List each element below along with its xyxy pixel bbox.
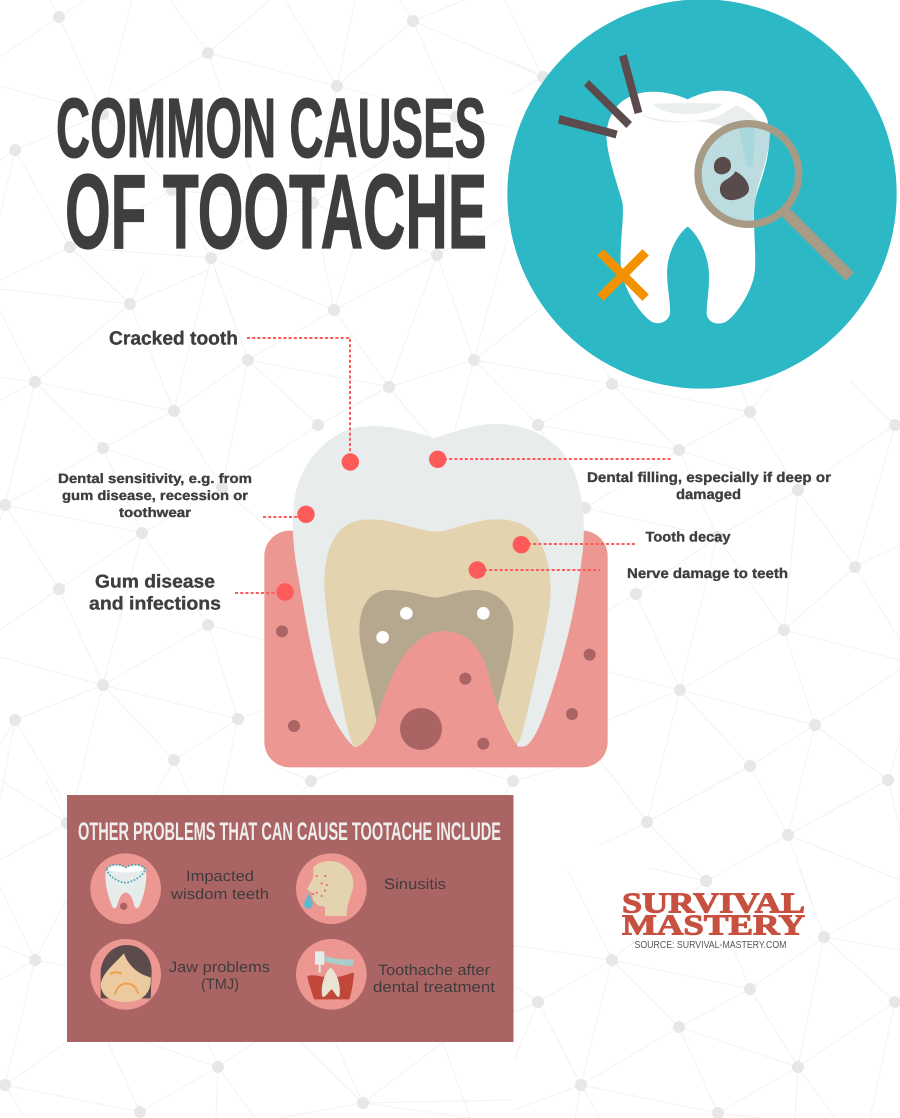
icon: jaw problems face (90, 939, 161, 1010)
cavities (714, 157, 749, 200)
item text: toothache after dental treatment: dental treatment (373, 979, 496, 996)
enamel (293, 424, 584, 747)
item text: impacted wisdom teeth (170, 868, 269, 903)
tooth anatomy diagram (264, 424, 608, 767)
item text: toothache after dental treatment (373, 962, 496, 996)
source line: SOURCE: SURVIVAL-MASTERY.COM (634, 939, 786, 951)
orange cross (600, 252, 646, 298)
label: gum disease: Gum disease (95, 570, 215, 592)
dentin (324, 519, 551, 747)
gum spots (276, 625, 596, 750)
icon: dental treatment (296, 939, 367, 1010)
label: dental sensitivity: Dental sensitivity, e.g. from (58, 471, 252, 486)
label: tooth decay: Tooth decay (646, 528, 731, 544)
magnifier ring and handle (785, 212, 850, 277)
item text: impacted wisdom teeth: wisdom teeth (170, 886, 269, 903)
label: dental sensitivity: gum disease, recession or (62, 488, 249, 503)
item text: jaw problems: Jaw problems (169, 959, 270, 976)
nerve dots (376, 607, 490, 644)
magnifier lens over the tooth (702, 127, 770, 221)
pulp chamber (359, 590, 513, 722)
label: dental filling: Dental filling, especially if deep or (587, 469, 832, 485)
title (56, 81, 487, 271)
item text: sinusitis: Sinusitis (384, 876, 446, 893)
hero badge: tooth under magnifying glass (507, 0, 897, 389)
icon: impacted wisdom tooth (90, 853, 161, 924)
label: dental sensitivity: toothwear (119, 505, 192, 520)
logo: Survival Mastery: MASTERY (622, 910, 805, 942)
teal circle (507, 0, 897, 389)
label: dental sensitivity (58, 471, 252, 520)
tooth crown shading (640, 103, 763, 128)
item text: toothache after dental treatment: Toothache after (378, 962, 490, 979)
label: dental filling: damaged (676, 486, 741, 502)
crack marks (558, 54, 642, 138)
logo: Survival Mastery: SURVIVAL (622, 888, 805, 920)
red markers (276, 451, 530, 601)
panel heading: OTHER PROBLEMS THAT CAN CAUSE TOOTACHE INCLUDE (78, 818, 501, 846)
gum arch between the roots (350, 631, 523, 757)
label: gum disease: and infections (89, 592, 221, 614)
panel: other problems (67, 795, 514, 1042)
logo: Survival Mastery (622, 888, 805, 942)
item text: jaw problems: (TMJ) (201, 976, 239, 993)
item text: impacted wisdom teeth: Impacted (186, 868, 254, 885)
label: cracked tooth: Cracked tooth (109, 328, 238, 350)
label: nerve damage: Nerve damage to teeth (627, 565, 788, 581)
item text: jaw problems (169, 959, 270, 993)
icon: sinus head (296, 853, 367, 924)
gum block (264, 531, 608, 767)
title: OF TOOTACHE (65, 153, 487, 271)
label: dental filling (587, 469, 832, 502)
dotted leader lines (235, 338, 672, 593)
icon: white tooth (607, 91, 769, 324)
title: COMMON CAUSES (56, 81, 486, 175)
label: gum disease (89, 570, 221, 614)
